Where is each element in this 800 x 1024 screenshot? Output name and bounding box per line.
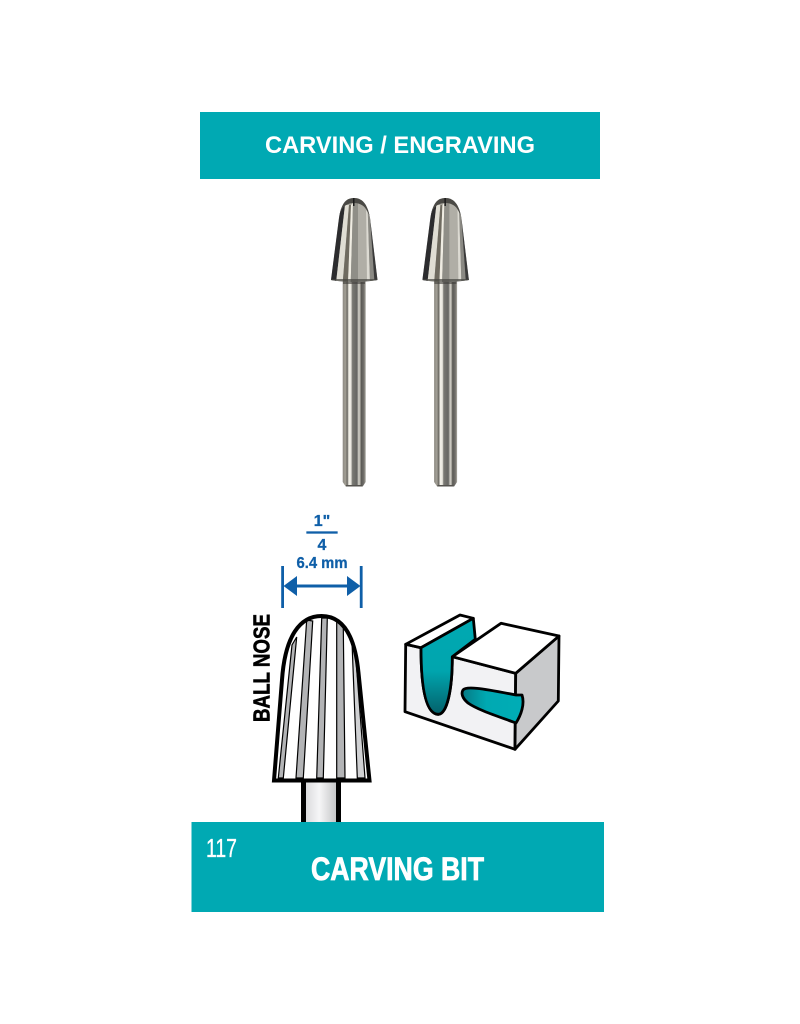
side groove [462,688,523,723]
infographic canvas [192,112,604,912]
block top face [452,623,559,673]
product number: 117 [206,833,237,863]
product name: CARVING BIT [311,851,484,887]
left ridge top [406,615,473,648]
label: ball nose: BALL NOSE [248,614,274,722]
header banner [200,112,600,179]
line drawing: ball nose bit head [274,616,370,780]
dimension label: 1/4 inch, 6.4 mm: 4 [318,537,327,554]
dimension label: 1/4 inch, 6.4 mm: 6.4 mm [296,555,348,572]
dimension arrow [281,566,363,608]
block right face [515,636,559,749]
line drawing: bit shank [301,781,341,823]
icon: carved workpiece block [405,615,559,749]
vertical groove [421,618,475,714]
photo: carving bit left [328,195,380,486]
dimension label: 1/4 inch, 6.4 mm [296,513,348,572]
header title: CARVING / ENGRAVING [265,132,535,159]
dimension label: 1/4 inch, 6.4 mm: 1" [314,513,330,530]
photo: carving bit right [419,195,471,486]
block front face [405,644,516,749]
footer banner [192,822,604,912]
